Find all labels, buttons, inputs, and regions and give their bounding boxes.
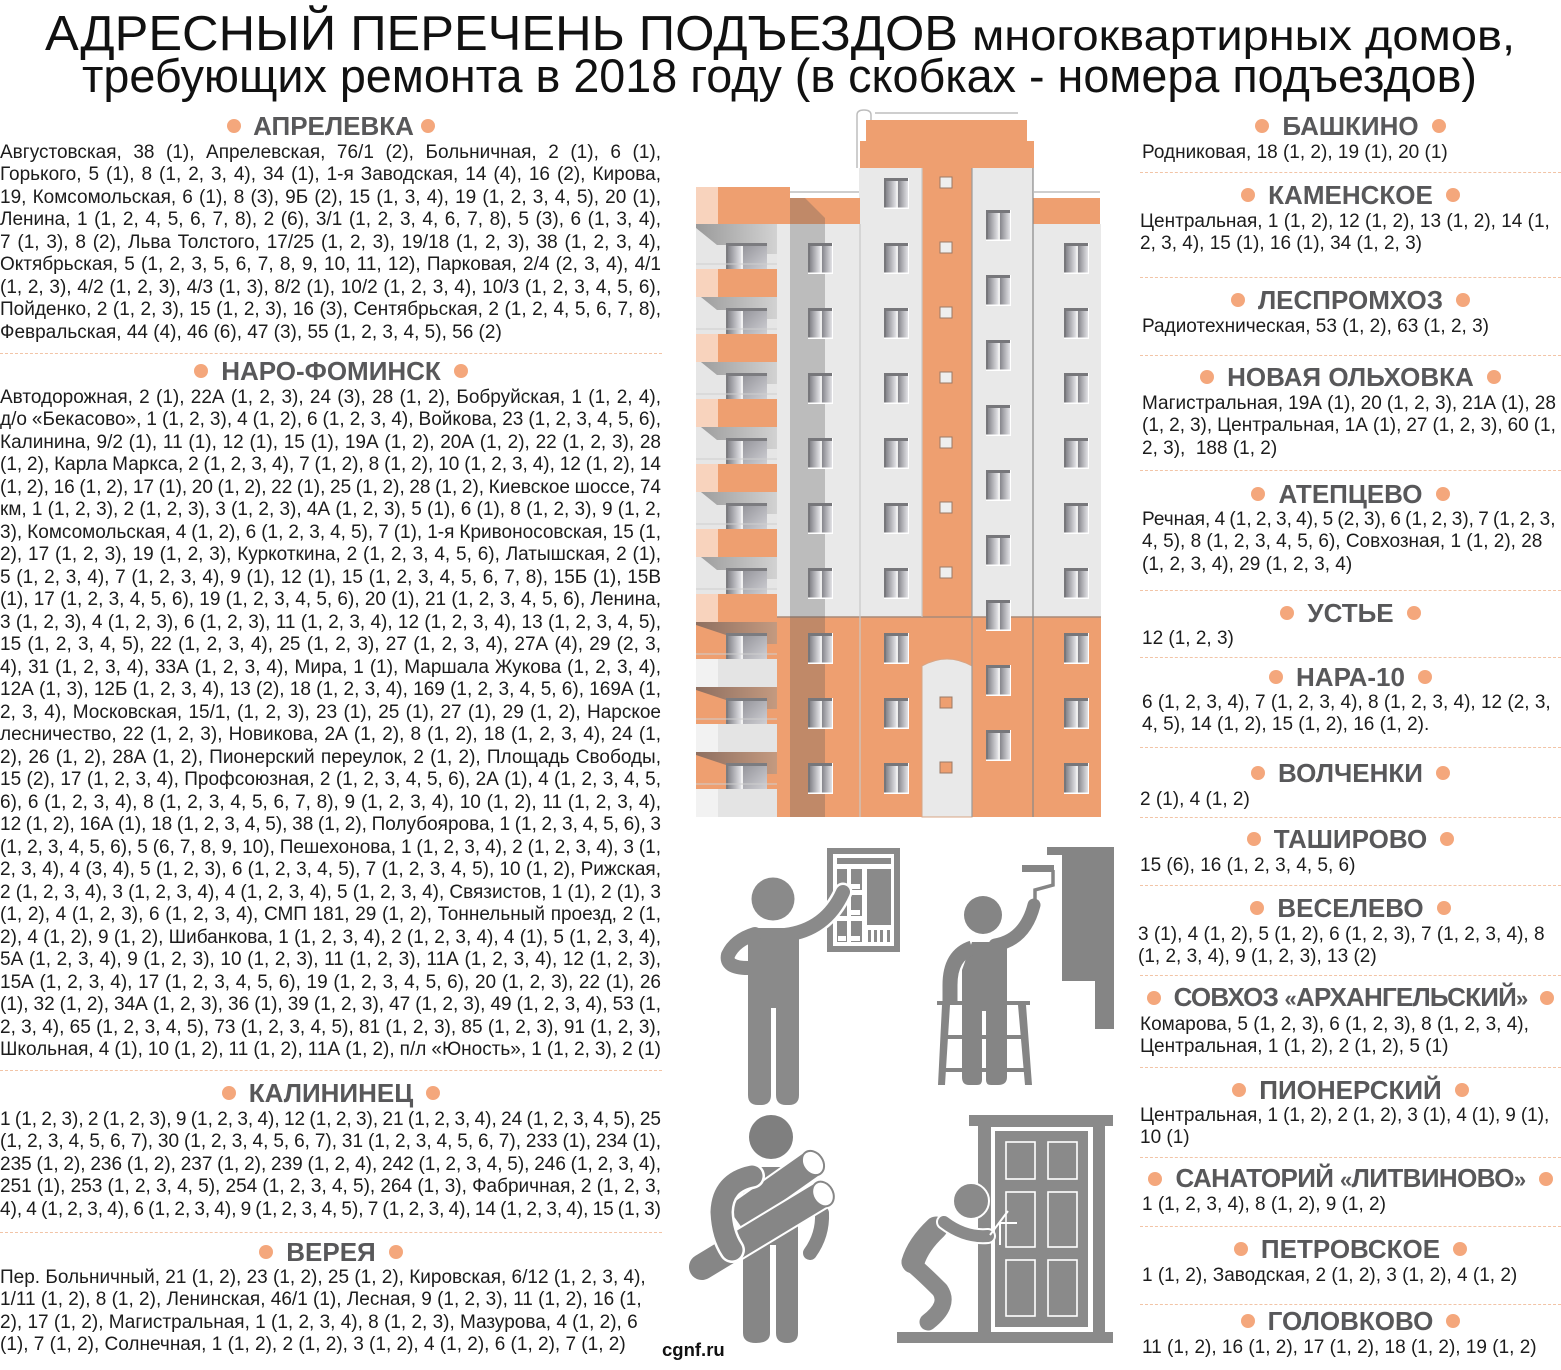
text: Апрелевка addresses: Февральская, 44 (4), 46 (6), 47 (3), 55 (1, 2, 3, 4, 5), 56 (2) xyxy=(0,322,502,342)
text: Веселево addresses xyxy=(1138,924,1545,968)
title xyxy=(45,5,1515,102)
text: Наро-Фоминск addresses: 12А (1, 3), 12Б (1, 2, 3, 4), 13 (2), 18 (1, 2, 3, 4), 169 (1, 2, 3, 4, 5, 6), 169А (1, xyxy=(0,679,661,700)
heading: Петровское xyxy=(1140,1234,1561,1264)
text: Наро-Фоминск addresses xyxy=(0,386,661,1060)
panel: Апрелевка xyxy=(0,111,661,342)
text: Петровское addresses: 1 (1, 2), Заводская, 2 (1, 2), 3 (1, 2), 4 (1, 2) xyxy=(1142,1264,1517,1286)
text: Наро-Фоминск addresses: 15А (1, 2, 3, 4), 17 (1, 2, 3, 4, 5, 6), 19 (1, 2, 3, 4, 5, 6), 20 (1, 2, 3), 22 (1), 26 xyxy=(0,972,661,992)
panel: Пионерский xyxy=(1140,1074,1561,1149)
text: Наро-Фоминск addresses: 5 (1, 2, 3, 4), 7 (1, 2, 3, 4), 9 (1), 12 (1), 15 (1, 2, 3, 4, 5, 6, 7, 8), 15Б (1), 15В xyxy=(0,566,661,588)
text: Наро-Фоминск addresses: 2), 17 (1, 2, 3), 19 (1, 2, 3), Куркоткина, 2 (1, 2, 3, 4, 5, 6), Латышская, 2 (1), xyxy=(0,544,661,565)
text: Наро-Фоминск addresses: 2, 3, 4), 4 (3, 4), 5 (1, 2, 3), 6 (1, 2, 3, 4, 5), 7 (1, 2, 3, 4, 5), 10 (1, 2), Рижская, xyxy=(0,859,661,880)
text: Пионерский addresses: Центральная, 1 (1, 2), 2 (1, 2), 3 (1), 4 (1), 9 (1), xyxy=(1140,1104,1549,1126)
title: требующих ремонта в 2018 году (в скобках - номера подъездов) xyxy=(82,49,1477,102)
text: Нара-10 addresses xyxy=(1142,692,1551,735)
text: Атепцево addresses: 4, 5), 8 (1, 2, 3, 4, 5, 6), Совхозная, 1 (1, 2), 28 xyxy=(1142,531,1542,552)
text: Волченки addresses: 2 (1), 4 (1, 2) xyxy=(1140,788,1250,810)
text: Новая Ольховка addresses: Магистральная, 19А (1), 20 (1, 2, 3), 21А (1), 28 xyxy=(1142,392,1556,414)
text: Наро-Фоминск addresses: 6), 6 (1, 2, 3, 4), 8 (1, 2, 3, 4, 5, 6, 7, 8), 9 (1, 2, 3, 4), 10 (1, 2), 11 (1, 2, 3, 4), xyxy=(0,792,661,812)
text: Верея addresses: (1), 7 (1, 2), Солнечная, 1 (1, 2), 2 (1, 2), 3 (1, 2), 4 (1, 2), 6 (1, 2), 7 (1, 2) xyxy=(0,1334,626,1355)
icon: man at door xyxy=(897,1115,1113,1343)
text: Наро-Фоминск addresses: 2, 3, 4), 65 (1, 2, 3, 4, 5), 73 (1, 2, 3, 4, 5), 81 (1, 2, 3), 85 (1, 2, 3), 91 (1, 2, 3), xyxy=(0,1016,661,1038)
panel: Совхоз «Архангельский» xyxy=(1140,982,1561,1058)
panel: Башкино xyxy=(1142,111,1448,162)
panel: Атепцево xyxy=(1142,479,1555,574)
text: Наро-Фоминск addresses: 15 (1, 2, 3, 4, 5), 22 (1, 2, 3, 4), 25 (1, 2, 3), 27 (1, 2, 3, 4), 27А (4), 29 (2, 3, xyxy=(0,634,661,655)
heading: Веселево xyxy=(1140,893,1561,923)
heading: Петровское: ПЕТРОВСКОЕ xyxy=(1261,1234,1440,1264)
arched entrance xyxy=(922,659,972,817)
text: Апрелевка addresses: Горького, 5 (1), 8 (1, 2, 3, 4), 34 (1), 1-я Заводская, 14 (4), 16 (2), Кирова, xyxy=(0,164,661,185)
text: Наро-Фоминск addresses: 2, 3, 4), Московская, 15/1, (1, 2, 3), 23 (1), 25 (1), 27 (1), 29 (1, 2), Нарское xyxy=(0,702,661,722)
panel: Нара-10 xyxy=(1142,662,1551,735)
windows xyxy=(808,178,1089,794)
heading: Нара-10 xyxy=(1269,662,1432,692)
text: Апрелевка addresses xyxy=(0,142,661,342)
text: Пионерский addresses: 10 (1) xyxy=(1140,1127,1190,1148)
title: многоквартирных домов, xyxy=(972,12,1515,60)
title: АДРЕСНЫЙ ПЕРЕЧЕНЬ ПОДЪЕЗДОВ xyxy=(45,6,958,61)
text: Наро-Фоминск addresses: (1), 17 (1, 2, 3, 4, 5, 6), 19 (1, 2, 3, 4, 5, 6), 20 (1), 21 (1, 2, 3, 4, 5, 6), Ленина, xyxy=(0,589,661,610)
text: Наро-Фоминск addresses: 2), 4 (1, 2), 9 (1, 2), Шибанкова, 1 (1, 2, 3, 4), 2 (1, 2, 3, 4), 4 (1), 5 (1, 2, 3, 4), xyxy=(0,926,661,948)
heading: Пионерский: ПИОНЕРСКИЙ xyxy=(1259,1075,1442,1105)
text: Новая Ольховка addresses xyxy=(1142,392,1556,458)
building walls xyxy=(696,168,1101,817)
heading: Леспромхоз: ЛЕСПРОМХОЗ xyxy=(1258,285,1443,315)
text: Апрелевка addresses: Пойденко, 2 (1, 2, 3), 15 (1, 2, 3), 16 (3), Сентябрьская, 2 (1, 2, 4, 5, 6, 7, 8), xyxy=(0,299,661,320)
heading: Каменское: КАМЕНСКОЕ xyxy=(1268,180,1433,210)
text: Таширово addresses: 15 (6), 16 (1, 2, 3, 4, 5, 6) xyxy=(1140,854,1355,876)
text: Верея addresses: Пер. Больничный, 21 (1, 2), 23 (1, 2), 25 (1, 2), Кировская, 6/12 (1, 2, 3, 4), xyxy=(0,1266,646,1288)
text: Наро-Фоминск addresses: 4), 31 (1, 2, 3, 4), 33А (1, 2, 3, 4), Мира, 1 (1), Маршала Жукова (1, 2, 3, 4), xyxy=(0,656,661,678)
icon: man with fuse panel xyxy=(728,851,897,1105)
panel: Устье xyxy=(1142,598,1421,648)
text: Апрелевка addresses: (1, 2, 3), 4/2 (1, 2, 3), 4/3 (1, 3), 8/2 (1), 10/2 (1, 2, 3, 4), 10/3 (1, 2, 3, 4, 5, 6), xyxy=(0,276,661,298)
text: Совхоз «Архангельский» addresses: Центральная, 1 (1, 2), 2 (1, 2), 5 (1) xyxy=(1140,1036,1448,1057)
text: Наро-Фоминск addresses: Школьная, 4 (1), 10 (1, 2), 11 (1, 2), 11А (1, 2), п/л «Юность», 1 (1, 2, 3), 2 (1) xyxy=(0,1039,661,1060)
text: Наро-Фоминск addresses: Автодорожная, 2 (1), 22А (1, 2, 3), 24 (3), 28 (1, 2), Бобруйская, 1 (1, 2, 4), xyxy=(0,386,661,408)
panel: Верея xyxy=(0,1237,646,1355)
text: Верея addresses: 1/11 (1, 2), 8 (1, 2), Ленинская, 46/1 (1), Лесная, 9 (1, 2, 3), 11 (1, 2), 16 (1, xyxy=(0,1289,642,1310)
heading: Совхоз «Архангельский»: СОВХОЗ «АРХАНГЕЛЬСКИЙ» xyxy=(1174,982,1527,1012)
heading: Веселево: ВЕСЕЛЕВО xyxy=(1277,893,1424,923)
text: Пионерский addresses xyxy=(1140,1104,1549,1150)
heading: Наро-Фоминск: НАРО-ФОМИНСК xyxy=(221,356,441,386)
text: Каменское addresses: 2, 3, 4), 15 (1), 16 (1), 34 (1, 2, 3) xyxy=(1140,233,1422,254)
text: Каменское addresses xyxy=(1140,210,1550,254)
text: Наро-Фоминск addresses: (1, 2, 3, 4, 5, 6), 5 (6, 7, 8, 9, 10), Пешехонова, 1 (1, 2, 3, 4), 2 (1, 2, 3, 4), 3 (1, xyxy=(0,836,661,858)
panel: Головково xyxy=(1140,1305,1561,1358)
vertical seams xyxy=(860,168,1033,817)
text: Апрелевка addresses: 7 (1, 3), 8 (2), Льва Толстого, 17/25 (1, 2, 3), 19/18 (1, 2, 3), 38 (1, 2, 3, 4), xyxy=(0,232,661,252)
text: Апрелевка addresses: Ленина, 1 (1, 2, 4, 5, 6, 7, 8), 2 (6), 3/1 (1, 2, 3, 4, 6, 7, 8), 5 (3), 6 (1, 3, 4), xyxy=(0,209,661,230)
text: Веселево addresses: (1, 2, 3, 4), 9 (1, 2, 3), 13 (2) xyxy=(1138,946,1377,967)
heading: Устье xyxy=(1280,598,1421,628)
text: Каменское addresses: Центральная, 1 (1, 2), 12 (1, 2), 13 (1, 2), 14 (1, xyxy=(1140,210,1550,232)
text: Нара-10 addresses: 6 (1, 2, 3, 4), 7 (1, 2, 3, 4), 8 (1, 2, 3, 4), 12 (2, 3, xyxy=(1142,692,1551,712)
text: Совхоз «Архангельский» addresses: Комарова, 5 (1, 2, 3), 6 (1, 2, 3), 8 (1, 2, 3, 4), xyxy=(1140,1014,1529,1034)
text: Санаторий «Литвиново» addresses: 1 (1, 2, 3, 4), 8 (1, 2), 9 (1, 2) xyxy=(1142,1194,1386,1214)
panel: Леспромхоз xyxy=(1142,285,1489,336)
heading: Головково: ГОЛОВКОВО xyxy=(1268,1306,1433,1336)
text: Наро-Фоминск addresses: (1), 32 (1, 2), 34А (1, 2, 3), 36 (1), 39 (1, 2, 3), 47 (1, 2, 3), 49 (1, 2, 3, 4), 53 (1, xyxy=(0,994,661,1015)
heading: Санаторий «Литвиново»: САНАТОРИЙ «ЛИТВИНОВО» xyxy=(1175,1163,1526,1193)
text: Нара-10 addresses: 4, 5), 14 (1, 2), 15 (1, 2), 16 (1, 2). xyxy=(1142,714,1429,735)
text: Наро-Фоминск addresses: 3), Комсомольская, 4 (1, 2), 6 (1, 2, 3, 4, 5), 7 (1), 1-я Кривоносовская, 15 (1, xyxy=(0,522,661,542)
text: Наро-Фоминск addresses: (1, 2), Карла Маркса, 2 (1, 2, 3, 4), 7 (1, 2), 8 (1, 2), 10 (1, 2, 3, 4), 12 (1, 2), 14 xyxy=(0,454,661,475)
text: Наро-Фоминск addresses: (1, 2), 16 (1, 2), 17 (1), 20 (1, 2), 22 (1), 25 (1, 2), 28 (1, 2), Киевское шоссе, 74 xyxy=(0,476,661,498)
panel: Веселево xyxy=(1140,892,1561,968)
text: Калининец addresses: 4), 4 (1, 2, 3, 4), 6 (1, 2, 3, 4), 9 (1, 2, 3, 4, 5), 7 (1, 2, 3, 4), 14 (1, 2, 3, 4), 15 (1, 3) xyxy=(0,1198,661,1220)
panel: Петровское xyxy=(1140,1233,1561,1286)
icon: painter on stool xyxy=(937,847,1114,1085)
text: Калининец addresses: 1 (1, 2, 3), 2 (1, 2, 3), 9 (1, 2, 3, 4), 12 (1, 2, 3), 21 (1, 2, 3, 4), 24 (1, 2, 3, 4, 5), 25 xyxy=(0,1108,661,1130)
panel: Волченки xyxy=(1140,758,1450,810)
balconies xyxy=(696,224,777,817)
text: Наро-Фоминск addresses: (1, 2), 4 (1, 2, 3), 6 (1, 2, 3, 4), СМП 181, 29 (1, 2), Тоннельный проезд, 2 (1, xyxy=(0,904,661,925)
shadow on facade xyxy=(790,198,825,817)
text: Апрелевка addresses: 19, Комсомольская, 6 (1), 8 (3), 9Б (2), 15 (1, 3, 4), 19 (1, 2, 3, 4, 5), 20 (1), xyxy=(0,186,661,208)
heading: Нара-10: НАРА-10 xyxy=(1296,662,1405,692)
text: Наро-Фоминск addresses: 3 (1, 2, 3), 4 (1, 2, 3), 6 (1, 2, 3), 11 (1, 2, 3, 4), 12 (1, 2, 3, 4), 13 (1, 2, 3, 4, 5), xyxy=(0,612,661,632)
text: Наро-Фоминск addresses: 15 (2), 17 (1, 2, 3, 4), Профсоюзная, 2 (1, 2, 3, 4, 5, 6), 2А (1), 4 (1, 2, 3, 4, 5, xyxy=(0,769,661,790)
heading: Головково xyxy=(1140,1306,1561,1336)
text: Веселево addresses: 3 (1), 4 (1, 2), 5 (1, 2), 6 (1, 2, 3), 7 (1, 2, 3, 4), 8 xyxy=(1138,924,1545,944)
text: Апрелевка addresses: Августовская, 38 (1), Апрелевская, 76/1 (2), Больничная, 2 (1), 6 (1), xyxy=(0,142,661,162)
text: Наро-Фоминск addresses: 12 (1, 2), 16А (1), 18 (1, 2, 3, 4, 5), 38 (1, 2), Полубоярова, 1 (1, 2, 3, 4, 5, 6), 3 xyxy=(0,814,661,835)
heading: Устье: УСТЬЕ xyxy=(1307,598,1394,628)
text: Калининец addresses: 235 (1, 2), 236 (1, 2), 237 (1, 2), 239 (1, 2, 4), 242 (1, 2, 3, 4, 5), 246 (1, 2, 3, 4), xyxy=(0,1154,661,1174)
text: Калининец addresses: 251 (1), 253 (1, 2, 3, 4, 5), 254 (1, 2, 3, 4, 5), 264 (1, 3), Фабричная, 2 (1, 2, 3, xyxy=(0,1176,661,1197)
text: Калининец addresses xyxy=(0,1108,661,1220)
text: Наро-Фоминск addresses: 2), 26 (1, 2), 28А (1, 2), Пионерский переулок, 2 (1, 2), Площадь Свободы, xyxy=(0,746,661,768)
heading: Пионерский xyxy=(1140,1075,1561,1105)
text: Калининец addresses: (1, 2, 3, 4, 5, 6, 7), 30 (1, 2, 3, 4, 5, 6, 7), 31 (1, 2, 3, 4, 5, 6, 7), 233 (1), 234 (1), xyxy=(0,1131,661,1152)
heading: Волченки: ВОЛЧЕНКИ xyxy=(1278,758,1423,788)
heading: Новая Ольховка: НОВАЯ ОЛЬХОВКА xyxy=(1227,362,1474,392)
text: Наро-Фоминск addresses: д/о «Бекасово», 1 (1, 2, 3), 4 (1, 2), 6 (1, 2, 3, 4), Войкова, 23 (1, 2, 3, 4, 5, 6), xyxy=(0,409,661,430)
heading: Верея xyxy=(259,1237,403,1267)
text: Атепцево addresses: (1, 2, 3, 4), 29 (1, 2, 3, 4) xyxy=(1142,554,1352,574)
text: Верея addresses xyxy=(0,1266,646,1355)
icon: man carrying rolls xyxy=(702,1115,838,1343)
heading: Атепцево: АТЕПЦЕВО xyxy=(1278,479,1423,509)
panel: Санаторий «Литвиново» xyxy=(1140,1163,1561,1215)
text: Устье addresses: 12 (1, 2, 3) xyxy=(1142,628,1234,648)
panel: Калининец xyxy=(0,1078,661,1220)
text: Атепцево addresses xyxy=(1142,508,1555,574)
credit: cgnf.ru xyxy=(662,1339,725,1360)
text: Верея addresses: 2), 17 (1, 2), Магистральная, 1 (1, 2, 3, 4), 8 (1, 2, 3), Мазурова, 4 (1, 2), 6 xyxy=(0,1312,638,1332)
text: Наро-Фоминск addresses: 5А (1, 2, 3, 4), 9 (1, 2, 3), 10 (1, 2, 3), 11 (1, 2, 3), 11А (1, 2, 3, 4), 12 (1, 2, 3), xyxy=(0,949,661,970)
heading: Апрелевка: АПРЕЛЕВКА xyxy=(253,111,414,141)
heading: Таширово: ТАШИРОВО xyxy=(1274,824,1427,854)
stairwell small windows xyxy=(940,177,952,773)
text: Наро-Фоминск addresses: км, 1 (1, 2, 3), 2 (1, 2, 3), 3 (1, 2, 3), 4А (1, 2, 3), 5 (1), 6 (1), 8 (1, 2, 3), 9 (1, 2, xyxy=(0,499,661,520)
heading: Башкино: БАШКИНО xyxy=(1282,111,1419,141)
text: Совхоз «Архангельский» addresses xyxy=(1140,1014,1529,1058)
panel: Наро-Фоминск xyxy=(0,356,661,1060)
roof and orange bands xyxy=(696,110,1101,617)
panel: Новая Ольховка xyxy=(1142,362,1556,458)
text: Наро-Фоминск addresses: лесничество, 22 (1, 2, 3), Новикова, 2А (1, 2), 8 (1, 2), 18 (1, 2, 3, 4), 24 (1, xyxy=(0,724,661,745)
text: Новая Ольховка addresses: (1, 2, 3), Центральная, 1А (1), 27 (1, 2, 3), 60 (1, xyxy=(1142,415,1556,436)
heading: Верея: ВЕРЕЯ xyxy=(286,1237,376,1267)
text: Новая Ольховка addresses: 2, 3), 188 (1, 2) xyxy=(1142,438,1277,458)
text: Башкино addresses: Родниковая, 18 (1, 2), 19 (1), 20 (1) xyxy=(1142,142,1448,162)
heading: Калининец: КАЛИНИНЕЦ xyxy=(249,1078,413,1108)
text: Леспромхоз addresses: Радиотехническая, 53 (1, 2), 63 (1, 2, 3) xyxy=(1142,316,1489,336)
panel: Каменское xyxy=(1140,180,1550,254)
text: Наро-Фоминск addresses: Калинина, 9/2 (1), 11 (1), 12 (1), 15 (1), 19А (1, 2), 20А (1, 2), 22 (1, 2, 3), 28 xyxy=(0,432,661,452)
text: Наро-Фоминск addresses: 2 (1, 2, 3, 4), 3 (1, 2, 3, 4), 4 (1, 2, 3, 4), 5 (1, 2, 3, 4), Связистов, 1 (1), 2 (1), 3 xyxy=(0,882,661,902)
text: Атепцево addresses: Речная, 4 (1, 2, 3, 4), 5 (2, 3), 6 (1, 2, 3), 7 (1, 2, 3, xyxy=(1142,508,1555,530)
text: Головково addresses: 11 (1, 2), 16 (1, 2), 17 (1, 2), 18 (1, 2), 19 (1, 2) xyxy=(1142,1336,1537,1358)
text: Апрелевка addresses: Октябрьская, 5 (1, 2, 3, 5, 6, 7, 8, 9, 10, 11, 12), Парковая, 2/4 (2, 3, 4), 4/1 xyxy=(0,254,661,275)
panel: Таширово xyxy=(1140,824,1454,876)
